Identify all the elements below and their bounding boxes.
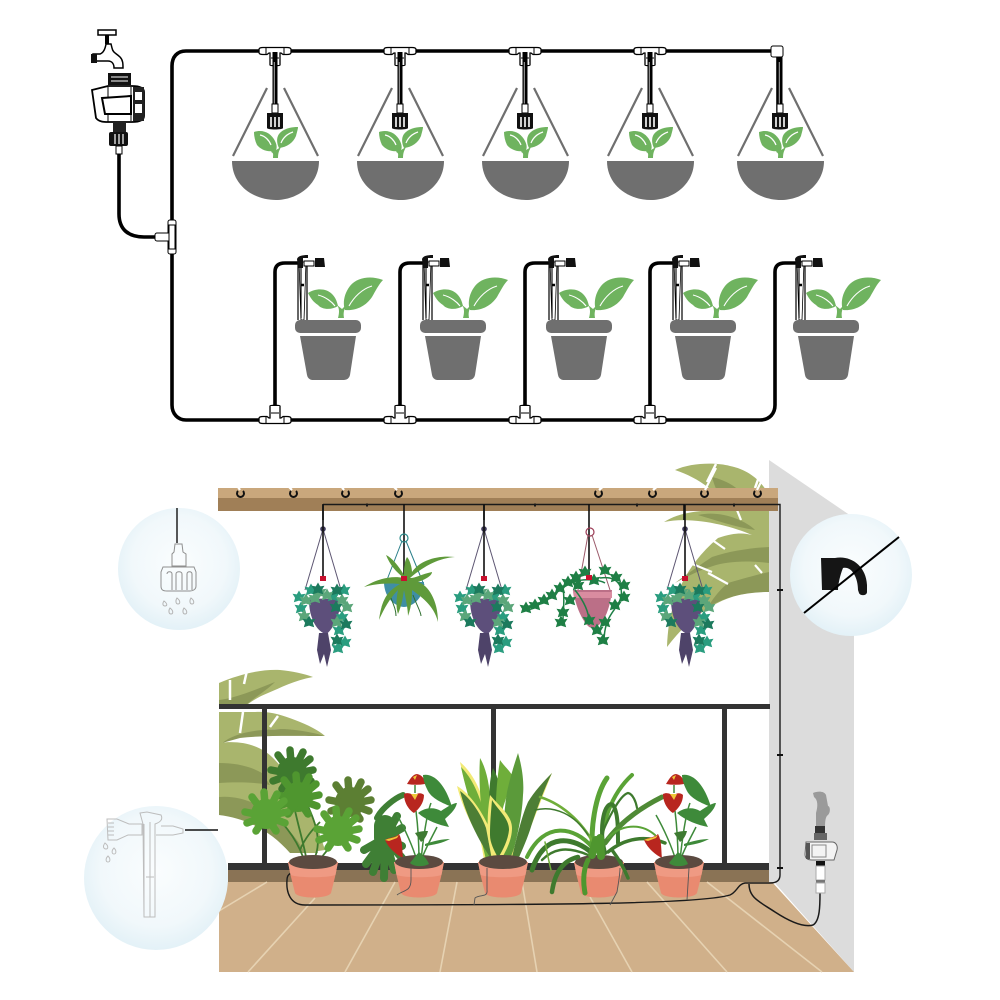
pot 2 xyxy=(420,255,508,380)
basket 5 xyxy=(737,52,824,200)
pot tube stems xyxy=(397,868,689,905)
side tee xyxy=(155,220,176,254)
callout: nozzle xyxy=(118,508,240,630)
floor plant: monstera xyxy=(245,750,371,857)
tap and timer on wall xyxy=(805,792,837,893)
floor plant: fern leaf xyxy=(364,795,403,878)
floor xyxy=(219,863,854,972)
pot 4 xyxy=(670,255,758,380)
floor plant: spider plant front xyxy=(552,838,628,893)
pot 1 xyxy=(295,255,383,380)
anthurium 1 base xyxy=(410,852,429,866)
hooks xyxy=(237,491,761,497)
hanging plant 5 xyxy=(654,505,716,667)
hook shanks xyxy=(238,468,762,490)
floor plant: spider plant back xyxy=(527,775,665,870)
end elbow xyxy=(771,46,783,57)
tap and timer xyxy=(91,30,144,154)
wall xyxy=(769,460,854,972)
floor plant: clay pot 2 xyxy=(394,855,444,898)
palm left xyxy=(219,666,325,853)
anthurium 2 base xyxy=(669,852,688,866)
callout: dripper stake xyxy=(84,806,228,950)
bottom tees xyxy=(259,405,666,424)
hanging plant 2 xyxy=(364,534,455,622)
floor plant: clay pot 3 xyxy=(478,855,528,898)
irrigation tube on balcony xyxy=(287,504,820,926)
floor plant: anthurium 2 xyxy=(644,774,716,861)
hanging plant 1 xyxy=(292,505,354,667)
pot 3 xyxy=(546,255,634,380)
floor plant: snake plant xyxy=(457,753,552,864)
timer xyxy=(92,86,144,122)
floor plant: anthurium 1 xyxy=(385,774,457,861)
hanging plant 4 xyxy=(520,528,630,645)
basket 3 xyxy=(482,52,569,200)
tap xyxy=(91,30,123,68)
clip markers on wall xyxy=(777,590,783,868)
floor plant: clay pot 5 xyxy=(654,855,704,898)
basket 2 xyxy=(357,52,444,200)
outlet xyxy=(109,122,128,154)
hanging plant 3 xyxy=(454,505,514,667)
wooden beam xyxy=(218,468,778,511)
main pipe loop xyxy=(119,51,805,420)
potted plant row xyxy=(259,255,881,424)
pot 5 xyxy=(793,255,881,380)
tee fittings top xyxy=(259,48,666,66)
hanging basket row xyxy=(232,48,824,200)
basket 4 xyxy=(607,52,694,200)
floor plant: clay pot 4 xyxy=(574,855,624,898)
basket 1 xyxy=(232,52,319,200)
palm top right xyxy=(664,464,769,647)
connector xyxy=(108,73,131,85)
railing xyxy=(219,704,770,864)
callout: clamp xyxy=(790,514,912,636)
floor plant: clay pot 1 xyxy=(288,855,338,898)
